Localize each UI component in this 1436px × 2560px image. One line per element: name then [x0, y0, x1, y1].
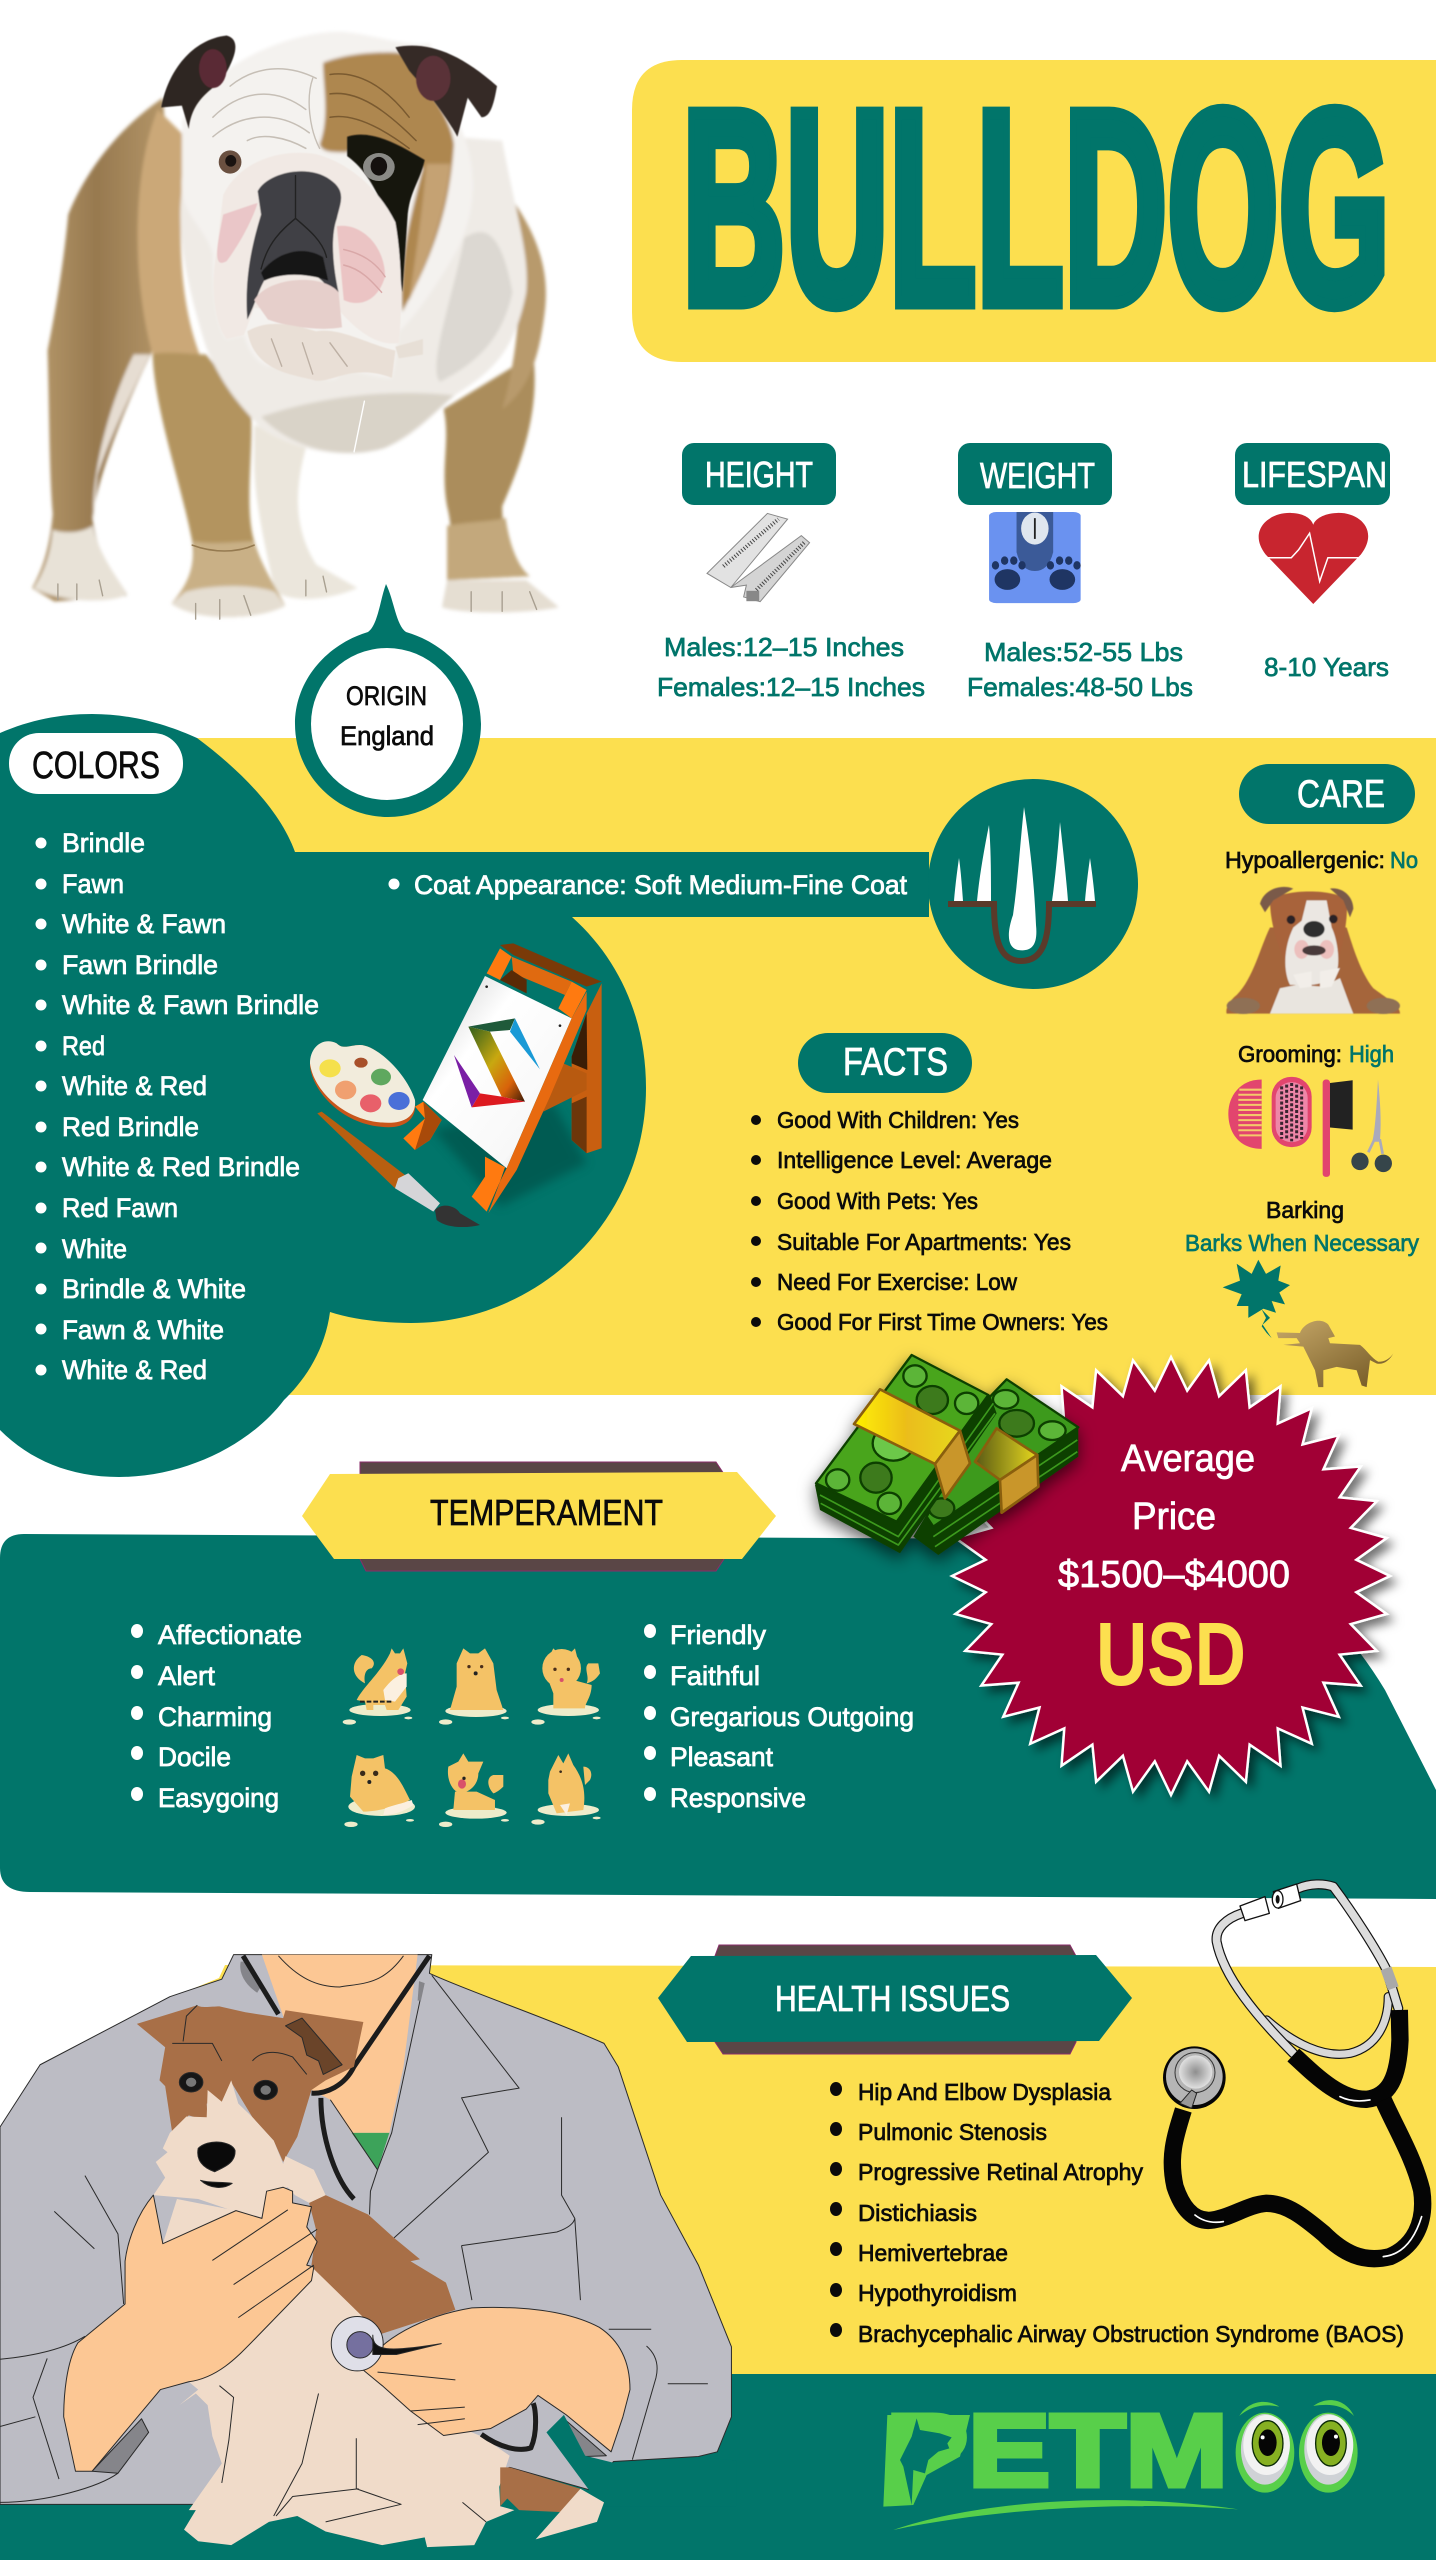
banner: health issues: HEALTH ISSUES [775, 1978, 1010, 2019]
banner: temperament [302, 1462, 776, 1571]
illustration: vet holding dog [0, 1955, 736, 2547]
list: colors: Red Fawn [62, 1193, 178, 1223]
list: colors [36, 828, 319, 1385]
list: colors: White & Red [62, 1071, 207, 1101]
logo text: PETM [886, 2393, 1228, 2508]
list: health issues: Hip And Elbow Dysplasia [858, 2079, 1112, 2105]
list: colors: White [62, 1234, 127, 1264]
icon: heart [1259, 513, 1368, 604]
text: barking: Barking [1266, 1197, 1344, 1223]
list: colors: Brindle [62, 828, 145, 858]
icon: lying bulldog [1226, 887, 1400, 1014]
text: weight values: Females:48-50 Lbs [967, 672, 1193, 702]
icon: grooming tools [1228, 1077, 1392, 1177]
logo mark, swoosh and eyes [883, 2400, 1358, 2530]
list: colors: Fawn Brindle [62, 950, 218, 980]
icon: stethoscope chest piece [1163, 2046, 1226, 2109]
label: weight [958, 443, 1112, 505]
panel: footer [0, 2374, 1436, 2560]
label: height: HEIGHT [705, 454, 813, 495]
list: colors: Red [62, 1031, 105, 1061]
panel: care [1185, 764, 1419, 1387]
list: facts: Need For Exercise: Low [777, 1269, 1018, 1295]
text: height values: Females:12–15 Inches [657, 672, 925, 702]
icon: barking dog [1223, 1260, 1393, 1387]
panel: facts [751, 1033, 1108, 1335]
label: lifespan [1235, 443, 1390, 505]
dog 4 [350, 1755, 413, 1815]
icon: hair follicle [928, 779, 1138, 989]
text: height values: Males:12–15 Inches [664, 632, 904, 662]
list: temperament left: Docile [158, 1742, 231, 1772]
heading: colors: COLORS [32, 745, 160, 787]
heading: care: CARE [1297, 773, 1385, 816]
text: hypoallergenic: No [1390, 847, 1418, 873]
text: coat appearance: Coat Appearance: Soft Medium-Fine Coat [414, 870, 907, 900]
list: health issues [830, 2079, 1404, 2347]
dog 3 [542, 1648, 600, 1708]
callout: origin pin [295, 584, 481, 817]
list: facts: Good For First Time Owners: Yes [777, 1309, 1108, 1335]
text: hypoallergenic: Hypoallergenic: [1225, 847, 1385, 873]
list: health issues: Pulmonic Stenosis [858, 2119, 1047, 2145]
list: health issues: Progressive Retinal Atrophy [858, 2159, 1143, 2185]
list: temperament left [131, 1620, 302, 1813]
text: height values [657, 632, 925, 702]
heading: colors [9, 733, 183, 794]
list: facts: Suitable For Apartments: Yes [777, 1229, 1071, 1255]
list: temperament left: Charming [158, 1702, 272, 1732]
icon: easel and palette [310, 943, 602, 1227]
list: health issues: Hypothyroidism [858, 2280, 1017, 2306]
list: temperament right: Gregarious Outgoing [670, 1702, 914, 1732]
icon: measuring tape [707, 513, 810, 602]
heading: facts [798, 1033, 972, 1093]
list: colors: White & Fawn Brindle [62, 990, 319, 1020]
banner: temperament: TEMPERAMENT [430, 1492, 663, 1533]
list: temperament right: Pleasant [670, 1742, 773, 1772]
text: price: USD [1096, 1605, 1246, 1705]
label: lifespan: LIFESPAN [1242, 454, 1387, 495]
list: colors: Brindle & White [62, 1274, 246, 1304]
text: barking: Barks When Necessary [1185, 1230, 1419, 1256]
panel: health band [185, 1965, 1436, 2374]
panel: colors list [9, 733, 602, 1385]
list: health issues: Brachycephalic Airway Obstruction Syndrome (BAOS) [858, 2321, 1404, 2347]
panel: average price burst [952, 1357, 1390, 1795]
text: lifespan value: 8-10 Years [1264, 652, 1389, 682]
logo: petmoo [883, 2393, 1358, 2530]
list: temperament right [644, 1620, 914, 1813]
callout: origin pin: England [340, 721, 434, 751]
list: facts [751, 1107, 1108, 1335]
list: health issues: Hemivertebrae [858, 2240, 1008, 2266]
text: price [1058, 1438, 1290, 1705]
text: price: Average [1121, 1438, 1255, 1480]
list: temperament left: Easygoing [158, 1783, 279, 1813]
text: price: Price [1132, 1496, 1216, 1538]
icon: money stacks [815, 1355, 1078, 1555]
list: colors: White & Fawn [62, 909, 226, 939]
icons: six small dogs [343, 1648, 601, 1827]
text: weight values: Males:52-55 Lbs [984, 637, 1183, 667]
text: grooming: High [1349, 1041, 1394, 1067]
label: weight: WEIGHT [980, 455, 1095, 496]
dog 2 [450, 1648, 503, 1710]
panel: temperament [0, 1462, 1436, 1899]
text: weight values [967, 637, 1193, 702]
list: facts: Intelligence Level: Average [777, 1147, 1052, 1173]
list: temperament right: Friendly [670, 1620, 766, 1650]
icon: stethoscope [1172, 1884, 1423, 2259]
list: facts: Good With Children: Yes [777, 1107, 1019, 1133]
list: temperament right: Responsive [670, 1783, 806, 1813]
dog 5 [448, 1753, 503, 1810]
list: health issues: Distichiasis [858, 2200, 977, 2226]
banner: health issues [658, 1945, 1132, 2054]
label: height [682, 443, 836, 505]
panel: height [657, 443, 925, 702]
text: barking [1185, 1197, 1419, 1256]
panel: weight [958, 443, 1193, 702]
illustration: bulldog [32, 32, 559, 619]
dog 1 [354, 1648, 407, 1710]
list: colors: Red Brindle [62, 1112, 199, 1142]
heading: facts: FACTS [843, 1041, 948, 1084]
callout: origin pin: ORIGIN [346, 681, 427, 711]
text: price: $1500–$4000 [1058, 1554, 1290, 1596]
panel: colors teal blob [0, 714, 929, 1477]
dog 6 [548, 1753, 591, 1815]
list: colors: White & Red [62, 1355, 207, 1385]
heading: care [1239, 764, 1415, 824]
list: facts: Good With Pets: Yes [777, 1188, 978, 1214]
list: colors: Fawn & White [62, 1315, 224, 1345]
list: temperament left: Affectionate [158, 1620, 302, 1650]
background: top yellow band [0, 738, 1436, 1395]
text: grooming: Grooming: [1238, 1041, 1342, 1067]
panel: title banner [632, 54, 1436, 362]
list: temperament left: Alert [158, 1661, 215, 1691]
list: temperament right: Faithful [670, 1661, 760, 1691]
list: colors: White & Red Brindle [62, 1152, 300, 1182]
icon: scale [989, 512, 1081, 603]
panel: coat appearance [388, 779, 1138, 989]
list: colors: Fawn [62, 869, 124, 899]
panel: lifespan [1235, 443, 1390, 682]
